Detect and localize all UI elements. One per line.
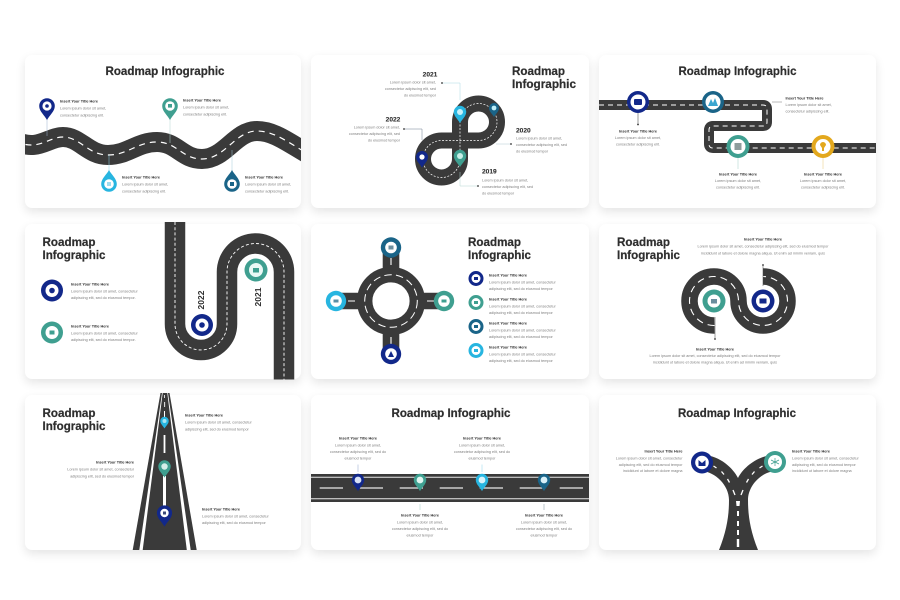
roundabout road xyxy=(336,247,444,355)
connectors xyxy=(403,82,512,187)
text block 3: Lorem ipsum dolor sit amet, xyxy=(715,179,761,183)
text block 4: Insert Your Title Here xyxy=(525,514,563,518)
text block: top: Lorem ipsum dolor sit amet, consectetur adipiscing elit, sed do eiusmod tempor xyxy=(698,244,829,248)
connectors xyxy=(358,464,544,510)
text block 3 xyxy=(454,436,510,460)
text: 2019: Lorem ipsum dolor sit amet, xyxy=(482,178,528,182)
list text 2: Lorem ipsum dolor sit amet, consectetur xyxy=(71,332,138,336)
text block 1: consectetur adipiscing elit, sed do xyxy=(330,450,386,454)
text block 2 xyxy=(183,98,229,116)
panel: figure-eight road xyxy=(311,55,589,212)
text block 3: Lorem ipsum dolor sit amet, xyxy=(122,182,168,186)
text block 4: Insert Your Title Here xyxy=(804,172,842,176)
marker: 2022 xyxy=(188,311,216,339)
list item 1 xyxy=(468,271,556,291)
text block 4 xyxy=(245,176,291,194)
text block 4 xyxy=(516,514,572,538)
heading xyxy=(42,235,106,262)
year label 2021: 2021 xyxy=(253,287,263,306)
heading: Infographic xyxy=(468,248,531,262)
text block 4: Lorem ipsum dolor sit amet, xyxy=(245,182,291,186)
text block 3: Insert Your Title Here xyxy=(122,176,160,180)
list text 1: Lorem ipsum dolor sit amet, consectetur xyxy=(71,290,138,294)
text: 2019: do eiusmod tempor xyxy=(482,192,515,196)
panel: roundabout xyxy=(311,224,589,383)
list item 2 xyxy=(468,295,556,315)
list item 3: adipiscing elit, sed do eiusmod tempor xyxy=(489,335,554,339)
marker: right xyxy=(764,451,786,473)
text block 3: adipiscing elit, sed do eiusmod tempor xyxy=(202,521,267,525)
pin 2 xyxy=(414,474,426,491)
list item 2: adipiscing elit, sed do eiusmod tempor xyxy=(489,311,554,315)
highway xyxy=(311,474,589,502)
text: 2022 xyxy=(349,116,401,142)
text block 1: Insert Your Title Here xyxy=(185,414,223,418)
heading xyxy=(42,406,106,433)
text: 2021: consectetur adipiscing elit, sed xyxy=(385,87,436,91)
heading: Infographic xyxy=(512,77,576,91)
perspective road xyxy=(133,393,197,550)
text block 1 xyxy=(60,100,106,118)
list item 1: adipiscing elit, sed do eiusmod tempor xyxy=(489,287,554,291)
text block: right xyxy=(792,450,859,473)
marker: microphone xyxy=(812,135,834,158)
text block 2: Lorem ipsum dolor sit amet, xyxy=(397,520,443,524)
text block 3 xyxy=(202,508,269,525)
text block 4: consectetur adipiscing elit. xyxy=(801,186,845,190)
text block 2: Lorem ipsum dolor sit amet, xyxy=(786,103,832,107)
panel: forked road xyxy=(599,395,876,554)
marker: left xyxy=(702,290,726,312)
text block: right: adipiscing elit, sed do eiusmod tempor xyxy=(792,463,857,467)
heading: Roadmap Infographic xyxy=(678,64,797,78)
panel: perspective road xyxy=(25,393,301,554)
pin 4 xyxy=(224,150,240,192)
text block 3: Insert Your Title Here xyxy=(202,508,240,512)
text block 1 xyxy=(615,130,661,146)
text block 4: Lorem ipsum dolor sit amet, xyxy=(521,520,567,524)
list text 1: adipiscing elit, sed do eiusmod tempor. xyxy=(71,296,136,300)
text: 2020: do eiusmod tempor xyxy=(516,150,549,154)
marker: bottom xyxy=(381,344,401,364)
marker: chart xyxy=(702,91,724,113)
text block 4: Lorem ipsum dolor sit amet, xyxy=(800,179,846,183)
pin 3 xyxy=(157,505,172,527)
text block 3: Insert Your Title Here xyxy=(463,436,501,440)
text block 1: consectetur adipiscing elit. xyxy=(60,114,104,118)
pin 3 xyxy=(476,474,488,491)
pin 2 xyxy=(162,98,178,143)
text block 2: adipiscing elit, sed do eiusmod tempor xyxy=(70,474,135,478)
marker: calendar xyxy=(726,135,750,158)
text block 1 xyxy=(330,436,386,460)
text block 3: consectetur adipiscing elit, sed do xyxy=(454,450,510,454)
text block 1 xyxy=(185,414,252,432)
text: 2022: Lorem ipsum dolor sit amet, xyxy=(354,126,400,130)
text block 1: Lorem ipsum dolor sit amet, xyxy=(335,444,381,448)
text block 1: Lorem ipsum dolor sit amet, xyxy=(615,136,661,140)
text: 2019 xyxy=(482,168,533,196)
text: 2021: do eiusmod tempor xyxy=(404,94,437,98)
text: 2020: consectetur adipiscing elit, sed xyxy=(516,143,567,147)
text block 3: Lorem ipsum dolor sit amet, consectetur xyxy=(202,514,269,518)
text block 4: eiusmod tempor xyxy=(531,534,558,538)
text block 4: consectetur adipiscing elit, sed do xyxy=(516,527,572,531)
text block 2 xyxy=(786,96,832,114)
text block 1: Insert Your Title Here xyxy=(60,100,98,104)
list item 3 xyxy=(468,319,556,339)
text block 3 xyxy=(122,176,168,194)
marker: right xyxy=(752,290,774,312)
text block 2: Insert Your Title Here xyxy=(401,514,439,518)
heading: Roadmap xyxy=(42,406,96,420)
figure-eight road xyxy=(423,104,497,178)
text block 2: Lorem ipsum dolor sit amet, xyxy=(183,106,229,110)
text: 2022: consectetur adipiscing elit, sed xyxy=(349,132,400,136)
heading: Roadmap xyxy=(512,64,565,78)
S-curve road xyxy=(690,276,788,326)
text block: bottom: Insert Your Title Here xyxy=(696,348,734,352)
marker: left xyxy=(691,452,713,474)
text block 3: Lorem ipsum dolor sit amet, xyxy=(459,444,505,448)
pin 1 xyxy=(160,417,169,429)
heading: Roadmap xyxy=(617,235,670,249)
serpentine road xyxy=(175,222,284,380)
text block 2: Insert Your Title Here xyxy=(96,460,134,464)
text block 4: Insert Your Title Here xyxy=(245,176,283,180)
text block 1: Lorem ipsum dolor sit amet, consectetur xyxy=(185,420,252,424)
marker: top xyxy=(381,237,401,258)
text: 2020: Lorem ipsum dolor sit amet, xyxy=(516,136,562,140)
text block 4 xyxy=(800,172,846,190)
list text 2 xyxy=(71,324,138,342)
marker: left xyxy=(326,291,346,311)
heading: Infographic xyxy=(617,248,680,262)
text block 1: eiusmod tempor xyxy=(345,456,372,460)
text block 3: eiusmod tempor xyxy=(469,456,496,460)
list text 2: Insert Your Title Here xyxy=(71,324,109,328)
panel: serpentine road xyxy=(25,222,301,383)
text block: left: Lorem ipsum dolor sit amet, consectetur xyxy=(616,456,683,460)
text block: top: incididunt ut labore et dolore magna aliqua. Ut enim ad minim veniam, quis xyxy=(701,252,825,256)
text block 1: Insert Your Title Here xyxy=(619,130,657,134)
marker: folder xyxy=(627,91,649,113)
list item 4: adipiscing elit, sed do eiusmod tempor xyxy=(489,359,554,363)
text block: left xyxy=(616,450,683,473)
pins xyxy=(416,103,499,168)
forked road xyxy=(702,455,775,550)
marker: 2021 xyxy=(244,258,268,282)
list item 2: Insert Your Title Here xyxy=(489,298,527,302)
text block: right: incididunt ut labore et dolore magna xyxy=(792,469,853,473)
text block: right: Lorem ipsum dolor sit amet, consectetur xyxy=(792,456,859,460)
panel: winding road xyxy=(15,55,312,212)
pin 1 xyxy=(39,98,55,136)
pin 2 xyxy=(158,460,171,478)
list item 2: Lorem ipsum dolor sit amet, consectetur xyxy=(489,304,556,308)
text block: left: incididunt ut labore et dolore magna xyxy=(623,469,683,473)
list item 4: Insert Your Title Here xyxy=(489,346,527,350)
list item 3: Lorem ipsum dolor sit amet, consectetur xyxy=(489,328,556,332)
text block: bottom xyxy=(650,348,781,364)
panel: switchback road xyxy=(599,55,876,212)
text block 1: Lorem ipsum dolor sit amet, xyxy=(60,106,106,110)
text block: right: Insert Your Title Here xyxy=(792,450,830,454)
marker: right xyxy=(434,291,454,311)
text block 3: consectetur adipiscing elit. xyxy=(716,186,760,190)
text block 3: consectetur adipiscing elit. xyxy=(122,190,166,194)
text block: left: Insert Your Title Here xyxy=(645,450,682,454)
connectors xyxy=(714,264,764,340)
heading xyxy=(617,235,680,262)
list item 4 xyxy=(468,343,556,363)
text: 2019: consectetur adipiscing elit, sed xyxy=(482,185,533,189)
list marker 2 xyxy=(41,322,63,344)
text block 2: Insert Your Title Here xyxy=(786,96,823,100)
text block 2: consectetur adipiscing elit. xyxy=(786,110,829,114)
heading: Infographic xyxy=(42,419,106,433)
heading: Roadmap xyxy=(468,235,521,249)
list text 1: Insert Your Title Here xyxy=(71,282,109,286)
text block: top: Insert Your Title Here xyxy=(744,238,782,242)
list text 2: adipiscing elit, sed do eiusmod tempor. xyxy=(71,338,136,342)
text: 2021: 2021 xyxy=(423,72,438,78)
text: 2022: do eiusmod tempor xyxy=(368,138,401,142)
text block: bottom: Lorem ipsum dolor sit amet, consectetur adipiscing elit, sed do eiusmod tempor xyxy=(650,354,781,358)
text: 2021: Lorem ipsum dolor sit amet, xyxy=(390,80,436,84)
list item 3: Insert Your Title Here xyxy=(489,322,527,326)
text block 2: consectetur adipiscing elit, sed do xyxy=(392,527,448,531)
text block 2: Lorem ipsum dolor sit amet, consectetur xyxy=(67,468,135,472)
list text 1 xyxy=(71,282,138,300)
text block 3 xyxy=(715,172,761,190)
text block 2: eiusmod tempor xyxy=(407,534,434,538)
year label 2022: 2022 xyxy=(196,290,206,309)
panel: straight highway xyxy=(311,395,589,554)
text block 1: Insert Your Title Here xyxy=(339,436,377,440)
text: 2020: 2020 xyxy=(516,128,531,134)
heading: Roadmap Infographic xyxy=(678,406,796,420)
text: 2021 xyxy=(385,72,438,98)
text: 2022: 2022 xyxy=(386,116,401,124)
heading: Roadmap xyxy=(42,235,96,249)
text block 2: Insert Your Title Here xyxy=(183,98,221,102)
heading: Roadmap Infographic xyxy=(392,406,511,420)
heading xyxy=(468,235,531,262)
list item 1: Insert Your Title Here xyxy=(489,274,527,278)
text: 2019: 2019 xyxy=(482,168,497,176)
text block 2 xyxy=(392,514,448,538)
text block 1: adipiscing elit, sed do eiusmod tempor xyxy=(185,428,250,432)
switchback road xyxy=(599,105,876,148)
heading: Roadmap Infographic xyxy=(106,64,225,78)
heading: Infographic xyxy=(42,248,106,262)
list marker 1 xyxy=(41,280,63,302)
text block: bottom: incididunt ut labore et dolore magna aliqua. Ut enim ad minim veniam, quis xyxy=(653,360,777,364)
list item 1: Lorem ipsum dolor sit amet, consectetur xyxy=(489,280,556,284)
text block: left: adipiscing elit, sed do eiusmod tempor xyxy=(619,463,683,467)
text block 1: consectetur adipiscing elit. xyxy=(616,142,660,146)
panel: S-curve road xyxy=(599,224,876,383)
pin 3 xyxy=(101,155,117,192)
pin 4 xyxy=(538,474,550,491)
text: 2020 xyxy=(516,128,567,154)
connectors xyxy=(637,102,823,169)
text block 3: Insert Your Title Here xyxy=(719,172,757,176)
text block: top xyxy=(698,238,829,256)
heading xyxy=(512,64,576,91)
text block 2: consectetur adipiscing elit. xyxy=(183,112,227,116)
text block 4: consectetur adipiscing elit. xyxy=(245,190,289,194)
pin 1 xyxy=(352,474,364,491)
winding road xyxy=(15,131,312,159)
list item 4: Lorem ipsum dolor sit amet, consectetur xyxy=(489,352,556,356)
text block 2 xyxy=(67,460,135,478)
